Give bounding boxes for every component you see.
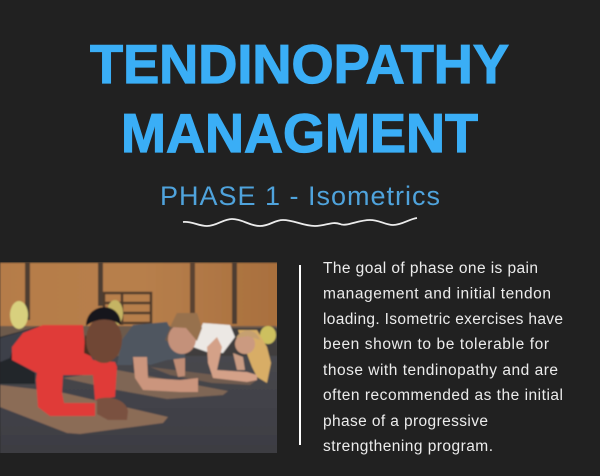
title: TENDINOPATHY (90, 33, 509, 95)
description text: often recommended as the initial (323, 387, 563, 404)
description text: strengthening program. (323, 438, 493, 455)
description text: management and initial tendon (323, 286, 551, 302)
back of room (0, 326, 280, 360)
photo: three people planking in a gym (0, 260, 280, 456)
description text: been shown to be tolerable for (323, 336, 549, 353)
weight plates (10, 301, 28, 329)
vertical divider (299, 265, 301, 445)
description text: The goal of phase one is pain (323, 260, 538, 277)
man in grey (117, 313, 202, 392)
shelf (104, 293, 151, 325)
gym wall (0, 262, 277, 327)
subtitle: PHASE 1 - Isometrics (160, 181, 440, 211)
man in red (0, 307, 128, 420)
description text: loading. Isometric exercises have (323, 311, 563, 328)
mats (150, 367, 257, 385)
description text (323, 260, 563, 455)
title: MANAGMENT (121, 102, 478, 164)
description text: phase of a progressive (323, 413, 488, 430)
description text: those with tendinopathy and are (323, 362, 558, 379)
woman (193, 323, 271, 383)
floor (0, 356, 280, 456)
wavy underline (183, 218, 417, 226)
title (90, 33, 509, 164)
